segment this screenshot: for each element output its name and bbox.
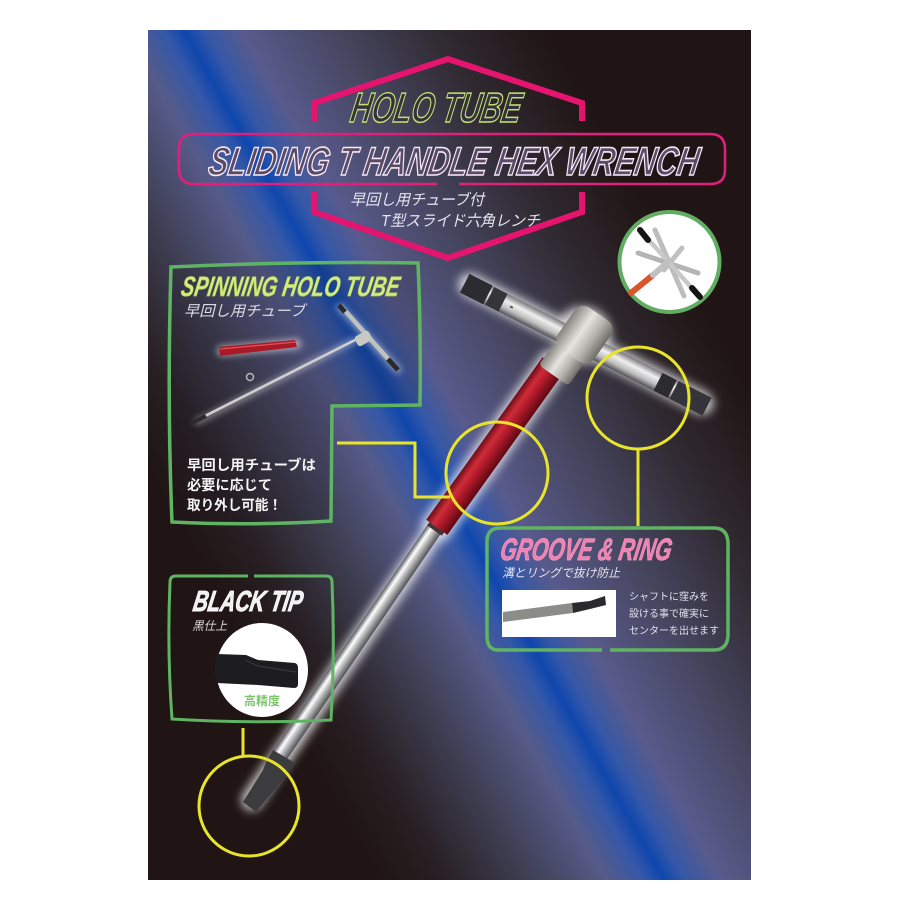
body text: 必要に応じて (187, 477, 272, 493)
wrench glow (252, 285, 702, 800)
subtitle (350, 191, 540, 230)
body text (629, 591, 719, 637)
subtitle: T型スライド六角レンチ (381, 212, 540, 230)
title hexagon frame (314, 59, 582, 258)
heading: spinning holo tube: SPINNING HOLO TUBE (179, 270, 403, 302)
title banner (179, 134, 725, 184)
callout: tube circle and leader (337, 422, 548, 524)
callout: tip circle and leader (199, 728, 299, 856)
callout: groove circle and leader (587, 347, 689, 526)
panel: groove and ring (487, 528, 728, 650)
wrench illustration (243, 274, 712, 812)
socket head (537, 302, 617, 389)
heading: SLIDING T HANDLE HEX WRENCH: SLIDING T HANDLE HEX WRENCH (205, 139, 704, 184)
cross bar (460, 274, 712, 416)
black tip (243, 750, 295, 812)
poster background (148, 30, 751, 880)
label: high precision: 高精度 (244, 693, 280, 708)
photo: hex tip close-up (215, 623, 308, 717)
sub heading: 黒仕上 (192, 619, 228, 633)
body text: センターを出せます (629, 625, 719, 637)
body text: 早回し用チューブは (187, 457, 316, 473)
heading: groove and ring: GROOVE & RING (498, 532, 675, 567)
body text (187, 457, 316, 513)
body text: 取り外し可能！ (187, 497, 282, 513)
heading: black tip: BLACK TIP (191, 586, 306, 618)
panel: black tip (169, 576, 333, 722)
sub heading: 溝とリングで抜け防止 (502, 566, 621, 580)
inset: rotation diagram (620, 212, 720, 312)
heading: HOLO TUBE: HOLO TUBE (347, 84, 527, 131)
body text: 設ける事で確実に (629, 607, 709, 620)
subtitle: 早回し用チューブ付 (350, 191, 486, 209)
photo: parts (192, 305, 398, 423)
panel: spinning holo tube (169, 262, 420, 524)
body text: シャフトに窪みを (629, 591, 709, 603)
sub heading: 早回し用チューブ (184, 303, 308, 320)
photo: groove detail (502, 590, 616, 637)
silver shaft (272, 520, 444, 762)
red tube (424, 357, 564, 538)
